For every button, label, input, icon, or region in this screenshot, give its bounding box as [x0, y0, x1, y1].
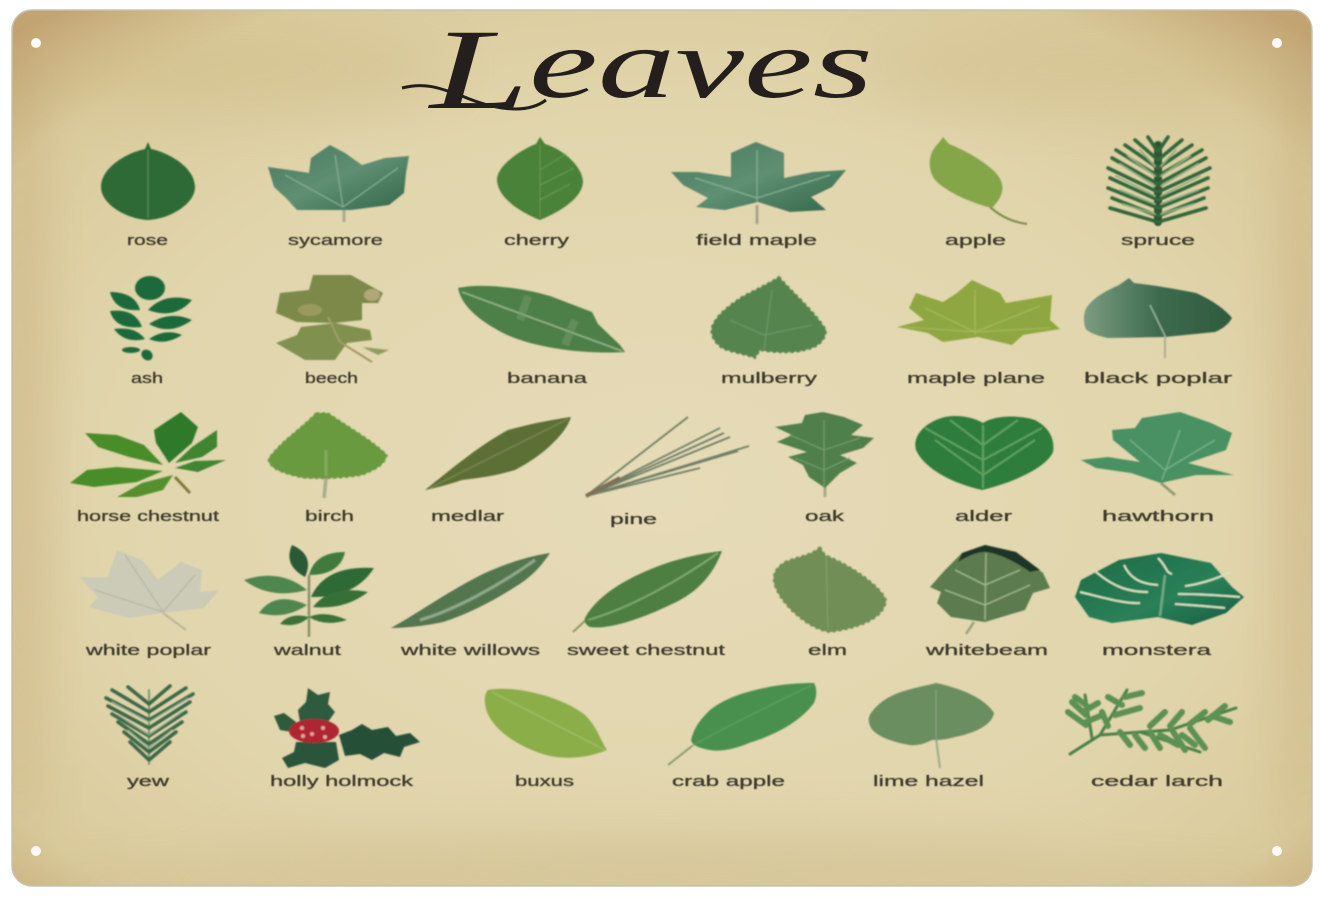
- label: beech: beech: [305, 370, 358, 387]
- icon: beech sprig: [276, 275, 389, 362]
- leaf: lime hazel: [869, 683, 994, 790]
- label: cedar larch: cedar larch: [1091, 773, 1223, 790]
- label: oak: oak: [805, 508, 845, 525]
- icon: alder leaf: [915, 416, 1053, 490]
- icon: horse chestnut leaf: [70, 412, 226, 497]
- title: eaves: [529, 8, 873, 119]
- leaf: maple plane: [897, 280, 1060, 387]
- leaf: cherry: [497, 137, 583, 249]
- leaf: apple: [930, 137, 1027, 249]
- icon: apple leaf: [930, 137, 1027, 224]
- label: spruce: spruce: [1121, 232, 1195, 249]
- icon: cedar sprig: [1068, 690, 1236, 754]
- icon: crab apple leaf: [668, 683, 816, 765]
- leaf: buxus: [485, 689, 607, 790]
- leaf: black poplar: [1084, 278, 1232, 387]
- title: [402, 6, 873, 133]
- icon: mounting hole bottom right: [1272, 846, 1282, 856]
- icon: cherry leaf: [497, 137, 583, 220]
- label: cherry: cherry: [504, 232, 570, 249]
- leaf: pine: [586, 417, 749, 528]
- icon: sweet chestnut leaf: [573, 551, 722, 632]
- icon: ash compound leaf: [110, 276, 192, 363]
- label: maple plane: maple plane: [907, 370, 1045, 387]
- leaf: oak: [775, 412, 874, 525]
- leaf: banana: [458, 286, 625, 387]
- leaf: horse chestnut: [70, 412, 226, 525]
- leaf: monstera: [1075, 553, 1244, 659]
- label: yew: yew: [127, 773, 169, 790]
- label: white willows: white willows: [399, 642, 540, 659]
- leaf: ash: [110, 276, 192, 387]
- icon: spruce sprig: [1108, 137, 1210, 222]
- icon: holly with red berries: [274, 688, 420, 768]
- leaf: yew: [106, 686, 193, 790]
- leaf: crab apple: [668, 683, 816, 790]
- icon: monstera leaf: [1075, 553, 1244, 625]
- icon: mulberry leaf: [711, 277, 826, 358]
- icon: banana leaf: [458, 286, 625, 352]
- leaf: mulberry: [711, 277, 826, 387]
- leaf: cedar larch: [1068, 690, 1236, 790]
- label: banana: banana: [507, 370, 588, 387]
- label: horse chestnut: horse chestnut: [77, 508, 220, 525]
- icon: lime hazel leaf: [869, 683, 994, 768]
- icon: walnut compound leaf: [244, 545, 374, 637]
- icon: pine needles: [586, 417, 749, 496]
- icon: field maple leaf: [671, 142, 846, 224]
- label: lime hazel: lime hazel: [873, 773, 984, 790]
- label: holly holmock: holly holmock: [270, 773, 414, 790]
- icon: sycamore leaf: [268, 145, 409, 222]
- leaf: hawthorn: [1081, 412, 1234, 525]
- leaf: holly holmock: [270, 688, 420, 790]
- leaf: whitebeam: [924, 545, 1050, 659]
- icon: birch leaf: [269, 413, 387, 498]
- icon: whitebeam leaf: [930, 545, 1050, 634]
- icon: white poplar leaf: [79, 550, 219, 630]
- icon: mounting hole top left: [31, 38, 41, 48]
- leaf: beech: [276, 275, 389, 387]
- icon: white willow leaf: [391, 553, 550, 628]
- icon: black poplar leaf: [1084, 278, 1232, 358]
- label: birch: birch: [305, 508, 354, 525]
- label: elm: elm: [808, 642, 847, 659]
- leaf: sweet chestnut: [567, 551, 726, 659]
- leaf: alder: [915, 416, 1053, 525]
- icon: hawthorn leaf: [1081, 412, 1234, 495]
- label: hawthorn: hawthorn: [1102, 508, 1214, 525]
- label: sycamore: sycamore: [288, 232, 383, 249]
- icon: mounting hole bottom left: [31, 846, 41, 856]
- label: pine: pine: [610, 511, 657, 528]
- leaf: rose: [101, 142, 195, 249]
- leaf: birch: [269, 413, 387, 525]
- leaf: walnut: [244, 545, 374, 659]
- icon: buxus leaf: [485, 689, 607, 758]
- label: rose: rose: [127, 232, 168, 249]
- icon: yew sprig: [106, 686, 193, 764]
- label: medlar: medlar: [431, 508, 504, 525]
- label: sweet chestnut: sweet chestnut: [567, 642, 726, 659]
- label: buxus: buxus: [515, 773, 574, 790]
- label: whitebeam: whitebeam: [924, 642, 1048, 659]
- label: monstera: monstera: [1102, 642, 1212, 659]
- icon: plane maple leaf: [897, 280, 1060, 345]
- leaf: white willows: [391, 553, 550, 659]
- label: ash: ash: [131, 370, 163, 387]
- label: field maple: field maple: [696, 232, 817, 249]
- label: apple: apple: [945, 232, 1006, 249]
- leaf: spruce: [1108, 137, 1210, 249]
- leaf: white poplar: [79, 550, 219, 659]
- icon: mounting hole top right: [1272, 38, 1282, 48]
- label: white poplar: white poplar: [84, 642, 211, 659]
- label: walnut: walnut: [272, 642, 342, 659]
- label: alder: alder: [955, 508, 1012, 525]
- icon: rose leaf: [101, 142, 195, 220]
- label: black poplar: black poplar: [1084, 370, 1232, 387]
- icon: elm leaf: [774, 547, 886, 632]
- leaf: medlar: [425, 417, 571, 525]
- title: L: [427, 6, 529, 133]
- leaf: sycamore: [268, 145, 409, 249]
- leaf: elm: [774, 547, 886, 659]
- icon: oak leaf: [775, 412, 874, 497]
- leaf: field maple: [671, 142, 846, 249]
- icon: medlar leaf: [425, 417, 571, 490]
- label: crab apple: crab apple: [672, 773, 785, 790]
- label: mulberry: mulberry: [721, 370, 818, 387]
